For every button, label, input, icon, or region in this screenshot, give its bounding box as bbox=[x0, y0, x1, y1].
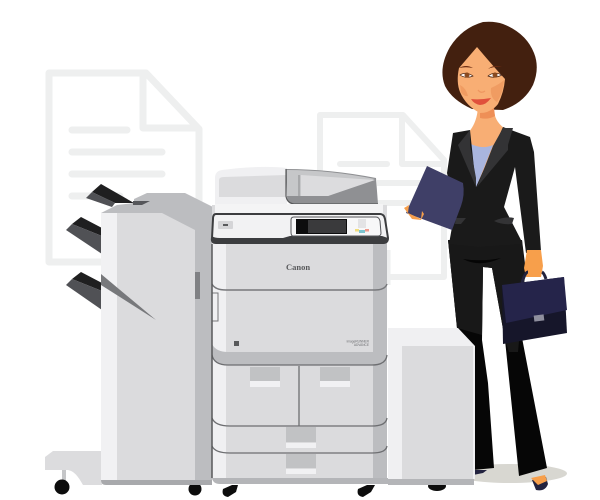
cheek blush bbox=[460, 80, 504, 102]
icon: small background document bbox=[320, 115, 444, 285]
jacket bbox=[447, 127, 541, 253]
tray: lower bbox=[66, 272, 102, 310]
finisher unit bbox=[101, 193, 213, 496]
upper door bbox=[212, 284, 387, 346]
model label: ADVANCE bbox=[354, 343, 369, 347]
panel button bbox=[218, 221, 233, 229]
shoes bbox=[473, 470, 548, 490]
eyes bbox=[460, 72, 502, 78]
model label bbox=[347, 340, 370, 347]
control panel bbox=[212, 214, 388, 244]
trousers bbox=[448, 240, 547, 476]
shadow under woman bbox=[453, 464, 567, 483]
touch screen bbox=[296, 219, 347, 234]
finisher output trays bbox=[66, 184, 150, 310]
eyebrows bbox=[459, 66, 502, 69]
nose bbox=[478, 90, 485, 92]
holding hand bbox=[404, 205, 424, 220]
briefcase bbox=[502, 272, 567, 344]
document feeder bbox=[286, 169, 378, 204]
neck and chest bbox=[468, 104, 504, 190]
brand label: Canon bbox=[286, 262, 310, 272]
woman bbox=[404, 22, 567, 490]
printer base bbox=[212, 478, 388, 484]
model label: imageRUNNER bbox=[347, 340, 370, 344]
printer main unit bbox=[212, 167, 388, 497]
printer body bbox=[212, 204, 387, 480]
keypad bbox=[355, 219, 369, 233]
paper drawers bbox=[212, 355, 387, 474]
finisher base with wheel bbox=[45, 451, 102, 494]
side paper deck bbox=[388, 328, 475, 491]
scanner lid bbox=[215, 167, 287, 206]
blouse bbox=[469, 143, 493, 188]
printer wheels bbox=[223, 485, 375, 497]
tray: top bbox=[86, 184, 150, 207]
hair back bbox=[442, 22, 537, 110]
head bbox=[442, 22, 537, 119]
neck shadow bbox=[480, 108, 495, 119]
tray: middle bbox=[66, 217, 102, 254]
mouth bbox=[471, 98, 491, 105]
folder bbox=[406, 166, 464, 230]
icon: large background document bbox=[49, 73, 199, 262]
output band bbox=[212, 340, 387, 365]
face bbox=[458, 47, 505, 113]
carrying hand bbox=[524, 250, 543, 277]
